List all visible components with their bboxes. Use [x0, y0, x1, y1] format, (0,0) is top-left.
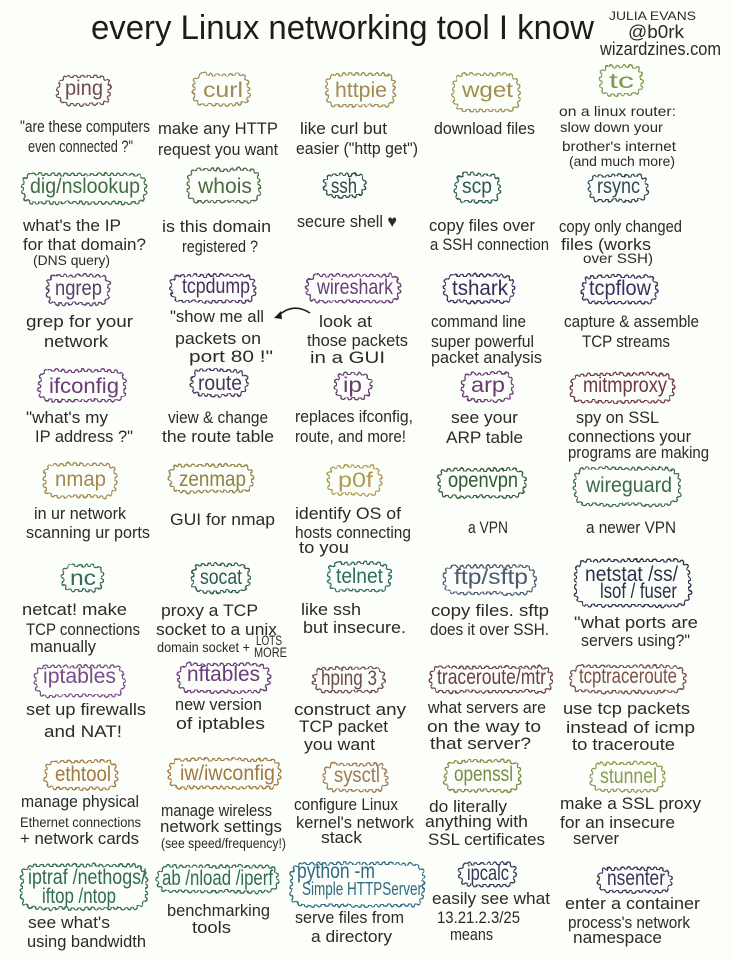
- description: curl: [158, 119, 278, 159]
- description: ip: replaces ifconfig,: [295, 407, 413, 426]
- badge: netstat/ss/lsof/fuser: netstat /ss/: [585, 563, 678, 586]
- description: route: view & change: [168, 408, 268, 427]
- badge: ping: ping: [65, 77, 103, 100]
- badge: dig/nslookup: dig/nslookup: [30, 175, 140, 198]
- description: iw/iwconfig: network settings: [160, 817, 282, 836]
- description: ping: "are these computers: [20, 117, 150, 136]
- description: tcptraceroute: use tcp packets: [563, 699, 690, 718]
- description: rsync: files (works: [561, 235, 651, 254]
- description: stunnel: server: [573, 829, 619, 848]
- description: scp: copy files over: [429, 216, 535, 235]
- description: iw/iwconfig: [160, 801, 286, 851]
- badge: ipcalc: ipcalc: [467, 862, 509, 885]
- description: whois: registered ?: [182, 237, 258, 256]
- description: iptraf/nethogs/iftop/ntop: see what's: [28, 913, 110, 932]
- description: socat: MORE: [254, 644, 287, 660]
- description: socat: socket to a unix: [156, 620, 278, 639]
- tool: telnet: [301, 564, 406, 637]
- badge: tc: tc: [609, 70, 634, 93]
- badge: nsenter: nsenter: [607, 867, 665, 890]
- description: p0f: identify OS of: [295, 504, 401, 523]
- description: p0f: hosts connecting: [295, 523, 411, 542]
- author credit: [599, 9, 721, 59]
- tool: p0f: [295, 467, 411, 557]
- badge: nc: nc: [70, 567, 96, 590]
- description: route: [162, 408, 274, 446]
- tool: wget: [434, 75, 535, 138]
- description: tcpflow: [564, 312, 699, 351]
- description: tcpdump: [170, 307, 273, 366]
- description: traceroute/mtr: what servers are: [427, 698, 546, 717]
- tool: ip: [295, 374, 413, 446]
- description: arp: ARP table: [446, 428, 523, 447]
- description: ip: route, and more!: [295, 427, 406, 446]
- description: openssl: [425, 797, 545, 849]
- description: python -m SimpleHTTPServer: serve files from: [295, 908, 404, 927]
- badge: rsync: rsync: [597, 175, 640, 198]
- description: sysctl: stack: [321, 828, 363, 847]
- description: netstat/ss/lsof/fuser: servers using?": [581, 631, 690, 650]
- author credit: wizardzines.com: [599, 39, 721, 59]
- badge: iptables: iptables: [43, 665, 116, 688]
- tool: tcpdump: [170, 275, 273, 366]
- description: nc: netcat! make: [22, 600, 127, 619]
- tool: ipcalc: [432, 862, 550, 944]
- description: ethtool: Ethernet connections: [20, 814, 141, 830]
- description: sysctl: kernel's network: [296, 813, 414, 832]
- tool: wireshark: [307, 276, 408, 367]
- tool: ifconfig: [26, 371, 133, 446]
- tool: nmap: [26, 465, 150, 542]
- description: tshark: packet analysis: [431, 348, 542, 367]
- description: rsync: over SSH): [583, 250, 653, 266]
- badge: netstat/ss/lsof/fuser: lsof / fuser: [600, 580, 677, 603]
- badge: ssh: ssh: [331, 175, 357, 198]
- description: ab/nload/iperf: [167, 901, 270, 937]
- tool: socat: [156, 565, 287, 660]
- description: wget: download files: [434, 119, 535, 138]
- tool: dig/nslookup: [22, 175, 146, 268]
- description: httpie: like curl but: [300, 119, 387, 138]
- tool: netstat/ss/lsof/fuser: [574, 561, 698, 650]
- description: tcptraceroute: to traceroute: [572, 735, 675, 754]
- description: hping3: you want: [304, 735, 375, 754]
- badge: tshark: tshark: [452, 277, 508, 300]
- description: ifconfig: "what's my: [26, 408, 109, 427]
- badge: socat: socat: [200, 566, 242, 589]
- description: nftables: of iptables: [176, 714, 265, 733]
- description: iptables: and NAT!: [44, 722, 122, 741]
- tool: httpie: [296, 75, 418, 158]
- description: nsenter: [565, 894, 700, 947]
- description: socat: proxy a TCP: [161, 601, 258, 620]
- description: dig/nslookup: for that domain?: [23, 235, 146, 254]
- description: openvpn: a VPN: [468, 518, 508, 537]
- description: zenmap: GUI for nmap: [170, 510, 275, 529]
- description: dig/nslookup: (DNS query): [33, 252, 110, 268]
- description: route: the route table: [162, 427, 274, 446]
- description: ngrep: network: [44, 332, 109, 351]
- badge: wireshark: wireshark: [316, 276, 393, 299]
- description: traceroute/mtr: that server?: [430, 734, 531, 753]
- description: stunnel: [560, 794, 701, 848]
- tool: ssh: [297, 175, 397, 231]
- badge: curl: curl: [203, 79, 243, 102]
- tool: hping3: [294, 667, 407, 754]
- description: tshark: [431, 312, 542, 367]
- badge: stunnel: stunnel: [600, 765, 657, 788]
- description: tcpflow: capture & assemble: [564, 312, 699, 331]
- description: scp: a SSH connection: [430, 235, 549, 254]
- description: mitmproxy: connections your: [568, 427, 691, 446]
- description: iptraf/nethogs/iftop/ntop: [27, 913, 146, 951]
- tool: nsenter: [565, 867, 700, 947]
- badge: python -m SimpleHTTPServer: [292, 860, 423, 905]
- badge: iptraf/nethogs/iftop/ntop: iptraf /nethogs/: [28, 866, 146, 889]
- description: nc: TCP connections: [26, 620, 140, 639]
- badge: python -m SimpleHTTPServer: Simple HTTPServer: [302, 879, 422, 899]
- badge: ip: ip: [343, 374, 362, 397]
- description: ftp/sftp: [430, 601, 549, 639]
- badge: wget: wget: [461, 79, 513, 102]
- description: ipcalc: 13.21.2.3/25: [437, 908, 520, 927]
- badge: httpie: httpie: [335, 79, 387, 102]
- description: tcpflow: TCP streams: [582, 332, 670, 351]
- description: ssh: secure shell ♥: [297, 212, 397, 231]
- description: nmap: scanning ur ports: [26, 523, 150, 542]
- description: iw/iwconfig: (see speed/frequency!): [161, 835, 286, 851]
- tool: openssl: [425, 762, 545, 849]
- badge: ab/nload/iperf: ab /nload /iperf: [162, 867, 273, 890]
- description: ethtool: [20, 792, 141, 848]
- badge: telnet: telnet: [336, 565, 383, 588]
- description: tcpdump: packets on: [175, 329, 261, 348]
- description: traceroute/mtr: [427, 698, 546, 753]
- description: nc: [22, 600, 140, 656]
- description: ngrep: grep for your: [26, 312, 133, 331]
- badge: ftp/sftp: ftp/sftp: [454, 566, 528, 589]
- description: wireshark: look at: [319, 312, 372, 331]
- badge: tcptraceroute: tcptraceroute: [579, 665, 677, 688]
- badge: tcpflow: tcpflow: [589, 277, 652, 300]
- description: telnet: but insecure.: [303, 618, 406, 637]
- description: ping: [20, 117, 150, 156]
- description: openssl: do literally: [429, 797, 507, 816]
- description: iptables: [26, 700, 146, 741]
- tool: iptraf/nethogs/iftop/ntop: [22, 866, 146, 951]
- description: httpie: [296, 119, 418, 158]
- tool: ftp/sftp: [430, 566, 549, 639]
- description: socat: LOTS: [256, 632, 282, 648]
- tool: rsync: [559, 175, 682, 266]
- badge: nftables: nftables: [187, 663, 260, 686]
- description: socat: [156, 601, 287, 660]
- description: curl: make any HTTP: [158, 119, 278, 138]
- description: p0f: [295, 504, 411, 557]
- tool: whois: [162, 170, 271, 256]
- description: hping3: [294, 700, 407, 754]
- badge: ngrep: ngrep: [55, 277, 102, 300]
- tool: tshark: [431, 276, 542, 367]
- tool: tcpflow: [564, 277, 699, 351]
- description: tcptraceroute: [563, 699, 695, 754]
- badge: p0f: p0f: [338, 469, 373, 492]
- badge: ifconfig: ifconfig: [49, 375, 119, 398]
- description: arp: [446, 408, 523, 447]
- tool: tcptraceroute: [563, 665, 695, 754]
- description: ngrep: [26, 312, 133, 351]
- description: ping: even connected ?": [28, 137, 133, 156]
- description: dig/nslookup: [22, 216, 146, 268]
- author credit: JULIA EVANS: [609, 9, 696, 23]
- badge: whois: whois: [197, 175, 252, 198]
- description: tcpdump: "show me all: [170, 307, 264, 326]
- description: p0f: to you: [299, 538, 349, 557]
- description: rsync: copy only changed: [559, 217, 682, 236]
- description: ipcalc: easily see what: [432, 889, 550, 908]
- description: ip: [295, 407, 413, 446]
- description: mitmproxy: [568, 408, 709, 462]
- description: telnet: like ssh: [301, 600, 361, 619]
- badge: iw/iwconfig: iw/iwconfig: [180, 762, 275, 785]
- description: ethtool: + network cards: [20, 829, 139, 848]
- badge: python -m SimpleHTTPServer: python -m: [297, 860, 375, 883]
- badge: traceroute/mtr: traceroute/mtr: [437, 666, 546, 689]
- badge: tcpdump: tcpdump: [182, 275, 250, 298]
- description: nc: manually: [30, 637, 96, 656]
- tool: mitmproxy: [568, 374, 709, 462]
- description: ftp/sftp: does it over SSH.: [430, 620, 549, 639]
- description: tshark: command line: [431, 312, 526, 331]
- description: netstat/ss/lsof/fuser: [574, 613, 698, 650]
- description: sysctl: [294, 795, 414, 847]
- badge: openvpn: openvpn: [448, 469, 518, 492]
- description: tc: slow down your: [560, 119, 663, 135]
- description: tc: on a linux router:: [559, 103, 676, 119]
- tool: iw/iwconfig: [160, 760, 286, 851]
- tool: ethtool: [20, 762, 141, 848]
- description: scp: [429, 216, 549, 254]
- description: stunnel: make a SSL proxy: [560, 794, 701, 813]
- badge: arp: arp: [471, 374, 505, 397]
- description: python -m SimpleHTTPServer: [295, 908, 404, 946]
- description: tc: [559, 103, 676, 169]
- description: python -m SimpleHTTPServer: a directory: [311, 927, 392, 946]
- description: wireshark: those packets: [307, 331, 408, 350]
- description: mitmproxy: spy on SSL: [576, 408, 659, 427]
- badge: netstat/ss/lsof/fuser: [576, 561, 689, 605]
- badge: scp: scp: [462, 175, 492, 198]
- description: whois: is this domain: [162, 217, 271, 236]
- tool: sysctl: [294, 764, 414, 847]
- description: ethtool: manage physical: [21, 792, 139, 811]
- badge: hping3: hping 3: [321, 667, 377, 690]
- description: ifconfig: IP address ?": [35, 427, 133, 446]
- tool: wireguard: [575, 469, 679, 537]
- description: tshark: super powerful: [431, 332, 534, 351]
- badge: openssl: openssl: [454, 763, 513, 786]
- description: mitmproxy: programs are making: [568, 443, 709, 462]
- description: nmap: in ur network: [34, 504, 126, 523]
- description: socat: domain socket +: [157, 639, 250, 655]
- tool: traceroute/mtr: [427, 666, 551, 753]
- description: iptables: set up firewalls: [26, 700, 146, 719]
- badge: nmap: nmap: [55, 468, 106, 491]
- title: every Linux networking tool I know: [91, 9, 594, 47]
- arrow: wireshark to tcpdump: [274, 308, 310, 319]
- badge: sysctl: sysctl: [334, 764, 380, 787]
- description: hping3: construct any: [294, 700, 407, 719]
- tool: stunnel: [560, 764, 701, 848]
- badge: route: route: [198, 372, 242, 395]
- badge: zenmap: zenmap: [179, 468, 246, 491]
- description: ftp/sftp: copy files. sftp: [431, 601, 549, 620]
- description: sysctl: configure Linux: [294, 795, 398, 814]
- badge: iptraf/nethogs/iftop/ntop: iftop /ntop: [42, 885, 116, 908]
- description: iptraf/nethogs/iftop/ntop: using bandwidth: [27, 932, 146, 951]
- description: stunnel: for an insecure: [560, 813, 675, 832]
- description: tc: brother's internet: [562, 138, 676, 154]
- description: ipcalc: [432, 889, 550, 944]
- description: iw/iwconfig: manage wireless: [161, 801, 272, 820]
- description: nmap: [26, 504, 150, 542]
- description: netstat/ss/lsof/fuser: "what ports are: [574, 613, 698, 632]
- description: wireshark: [307, 312, 408, 367]
- description: nftables: [175, 695, 265, 733]
- description: whois: [162, 217, 271, 256]
- tool: ping: [20, 77, 150, 156]
- description: nsenter: enter a container: [565, 894, 700, 913]
- badge: wireguard: wireguard: [585, 474, 672, 497]
- tool: nftables: [175, 663, 268, 733]
- description: nftables: new version: [175, 695, 262, 714]
- description: hping3: TCP packet: [299, 717, 388, 736]
- description: nsenter: process's network: [568, 913, 690, 932]
- description: telnet: [301, 600, 406, 637]
- author credit: @b0rk: [628, 22, 685, 42]
- tool: curl: [158, 75, 278, 159]
- description: ifconfig: [26, 408, 133, 446]
- tool: arp: [446, 374, 523, 447]
- description: nsenter: namespace: [573, 928, 662, 947]
- description: tcptraceroute: instead of icmp: [566, 718, 695, 737]
- tool: openvpn: [439, 469, 524, 537]
- badge: mitmproxy: mitmproxy: [583, 374, 667, 397]
- tool: zenmap: [170, 466, 275, 529]
- description: openssl: SSL certificates: [428, 830, 545, 849]
- tool: nc: [22, 566, 140, 656]
- description: openssl: anything with: [425, 812, 528, 831]
- description: wireguard: a newer VPN: [586, 518, 676, 537]
- description: traceroute/mtr: on the way to: [427, 717, 541, 736]
- description: wireshark: in a GUI: [310, 348, 385, 367]
- description: tc: (and much more): [569, 153, 675, 169]
- description: dig/nslookup: what's the IP: [22, 216, 121, 235]
- tool: ab/nload/iperf: [158, 867, 277, 937]
- description: rsync: [559, 217, 682, 266]
- tool: iptables: [26, 665, 146, 741]
- description: curl: request you want: [158, 140, 278, 159]
- description: ab/nload/iperf: tools: [192, 918, 231, 937]
- description: ab/nload/iperf: benchmarking: [167, 901, 270, 920]
- description: httpie: easier ("http get"): [296, 139, 418, 158]
- badge: ethtool: ethtool: [55, 763, 111, 786]
- description: tcpdump: port 80 !": [189, 347, 273, 366]
- tool: python -m SimpleHTTPServer: [292, 860, 423, 946]
- tool: tc: [559, 67, 676, 169]
- badge: iptraf/nethogs/iftop/ntop: [22, 866, 146, 908]
- tool: route: [162, 371, 274, 446]
- description: arp: see your: [451, 408, 518, 427]
- tool: ngrep: [26, 276, 133, 351]
- description: ipcalc: means: [450, 925, 493, 944]
- tool: scp: [429, 175, 549, 254]
